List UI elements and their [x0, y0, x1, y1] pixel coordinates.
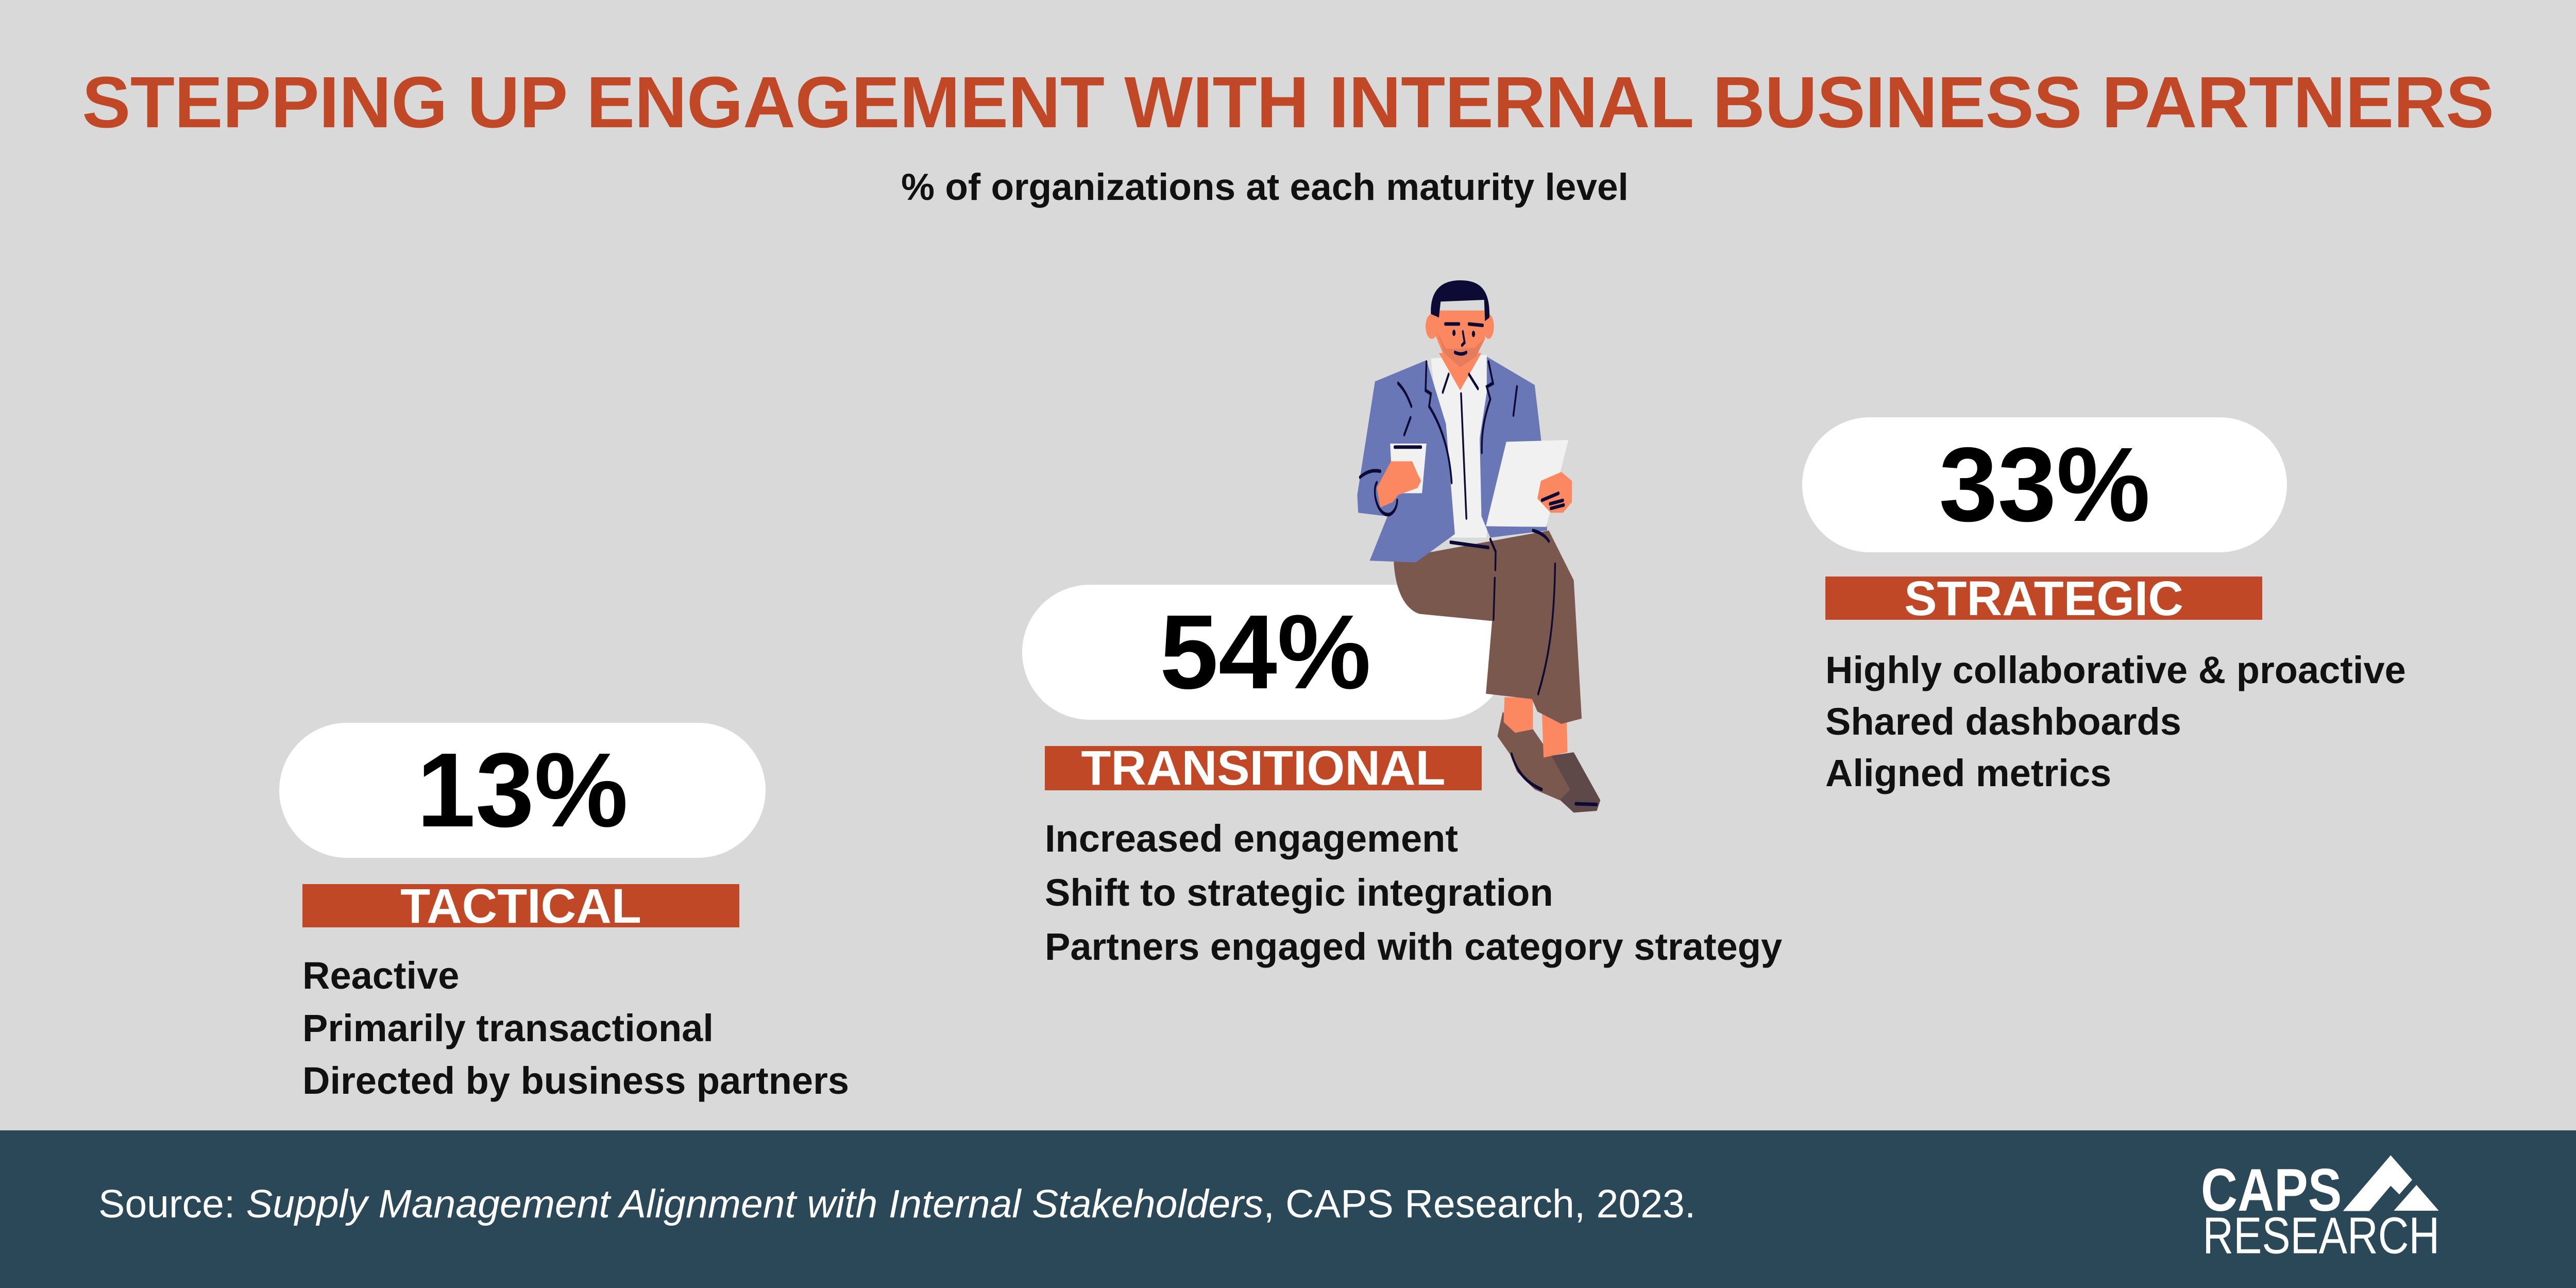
list: transitional traits: Partners engaged with category strategy [1045, 925, 1782, 968]
list: strategic traits [1825, 649, 2406, 794]
jacket [1357, 360, 1455, 563]
hands [1377, 461, 1421, 507]
pill: 33% [1802, 417, 2287, 552]
list: transitional traits [1045, 817, 1782, 968]
label bar: strategic: STRATEGIC [1904, 571, 2183, 626]
subtitle: % of organizations at each maturity level [901, 166, 1629, 208]
shirt [1431, 355, 1487, 537]
neck [1439, 353, 1482, 391]
illustration: seated man reading [1357, 280, 1600, 813]
trousers [1394, 531, 1582, 724]
pill: 13% [279, 723, 766, 858]
pill: 33%: 33% [1939, 426, 2150, 544]
list: strategic traits: Aligned metrics [1825, 752, 2111, 794]
panel: transitional [1022, 585, 1782, 968]
label bar: strategic [1825, 577, 2262, 620]
label bar: tactical: TACTICAL [400, 879, 641, 934]
title: STEPPING UP ENGAGEMENT WITH INTERNAL BUSINESS PARTNERS [82, 61, 2494, 143]
shoes [1538, 752, 1600, 812]
list: tactical traits: Directed by business partners [302, 1059, 849, 1102]
label bar: transitional [1045, 746, 1482, 790]
pill: 54% [1022, 585, 1509, 720]
paper [1486, 440, 1568, 527]
head [1426, 314, 1438, 339]
pill: 13%: 13% [417, 731, 628, 849]
list: transitional traits: Increased engagement [1045, 817, 1458, 860]
panel: tactical [279, 723, 849, 1102]
list: tactical traits [302, 954, 849, 1102]
pill: 54%: 54% [1160, 593, 1371, 711]
panel: strategic [1802, 417, 2406, 794]
footer bar [0, 1130, 2576, 1288]
label bar: transitional: TRANSITIONAL [1081, 741, 1446, 795]
logo: CAPS Research [2201, 1155, 2439, 1265]
list: tactical traits: Primarily transactional [302, 1007, 714, 1049]
cup [1390, 444, 1427, 493]
list: strategic traits: Shared dashboards [1825, 700, 2181, 743]
list: tactical traits: Reactive [302, 954, 459, 997]
source text: Source: Supply Management Alignment with Internal Stakeholders, CAPS Research, 2023. [98, 1182, 1696, 1226]
label bar: tactical [302, 884, 739, 927]
list: strategic traits: Highly collaborative & proactive [1825, 649, 2406, 691]
list: transitional traits: Shift to strategic integration [1045, 871, 1553, 914]
logo: CAPS Research: CAPS [2201, 1156, 2342, 1224]
ankles [1504, 697, 1533, 733]
